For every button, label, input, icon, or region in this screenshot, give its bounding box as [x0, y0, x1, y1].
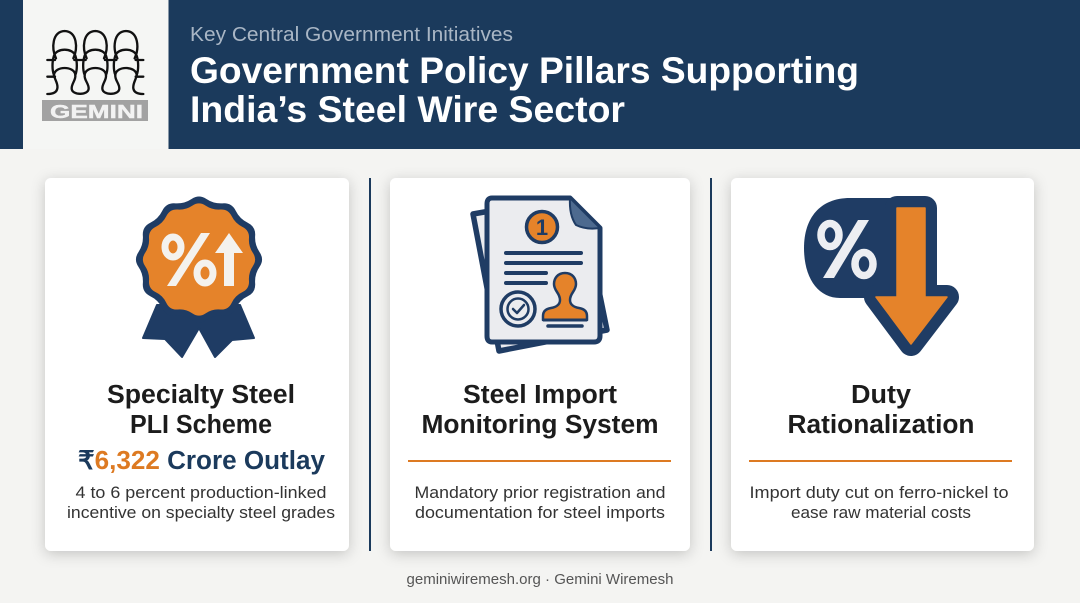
card heading: PLI Scheme — [130, 411, 272, 439]
card heading: Rationalization — [788, 411, 974, 439]
icon: percent badge — [136, 196, 262, 357]
panel: PLI scheme — [45, 178, 349, 551]
orange rule — [408, 460, 671, 462]
icon: documents and stamp: 1 — [536, 215, 548, 240]
orange rule — [749, 460, 1012, 462]
divider — [710, 178, 712, 551]
card heading — [788, 381, 974, 439]
header title: Government Policy Pillars Supporting — [190, 49, 859, 91]
logo panel — [23, 0, 168, 149]
icon: documents and stamp — [473, 198, 607, 351]
panel: import monitoring — [390, 178, 690, 551]
panel: duty rationalization — [731, 178, 1034, 551]
header eyebrow: Key Central Government Initiatives — [190, 24, 513, 46]
card description — [414, 483, 666, 522]
card description: incentive on specialty steel grades — [67, 503, 335, 522]
logo wordmark: GEMINI — [50, 102, 143, 122]
card heading — [422, 381, 658, 439]
card description: documentation for steel imports — [415, 503, 665, 522]
card description — [67, 483, 335, 522]
footer: geminiwiremesh.org · Gemini Wiremesh — [406, 571, 674, 588]
card heading: Duty — [851, 381, 912, 409]
card description: Mandatory prior registration and — [414, 483, 666, 502]
outlay figure: ₹6,322 Crore Outlay — [78, 447, 326, 475]
card heading: Steel Import — [463, 381, 618, 409]
header title: India’s Steel Wire Sector — [190, 88, 625, 130]
card heading: Monitoring System — [422, 411, 658, 439]
card description: Import duty cut on ferro-nickel to — [750, 483, 1008, 502]
card heading: Specialty Steel — [107, 381, 295, 409]
card description: 4 to 6 percent production-linked — [76, 483, 326, 502]
logo wordmark — [42, 100, 148, 122]
card description — [750, 483, 1008, 522]
divider — [369, 178, 371, 551]
icon: percent down arrow — [804, 198, 947, 344]
card description: ease raw material costs — [791, 503, 971, 522]
logo wire mesh — [47, 31, 143, 94]
card heading — [107, 381, 295, 439]
header band — [0, 0, 1080, 149]
header title — [190, 49, 859, 130]
